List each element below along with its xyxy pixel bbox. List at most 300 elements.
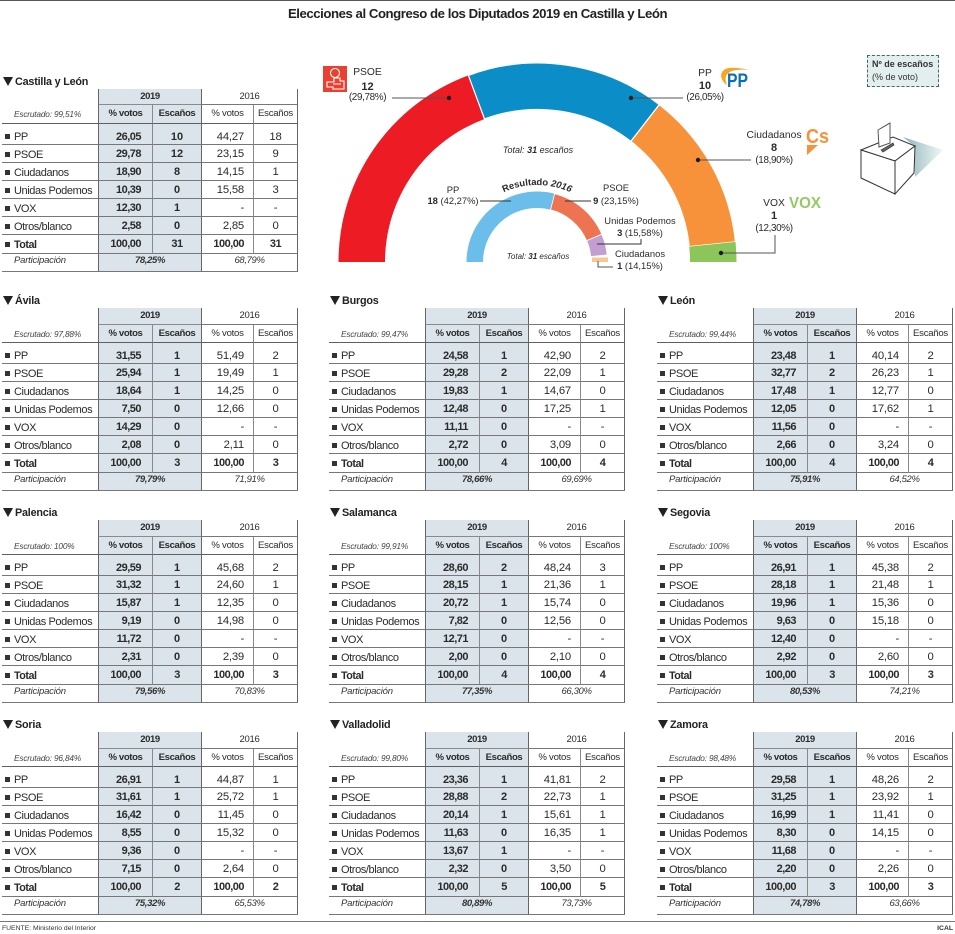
table: Zamora: 11,41	[873, 808, 899, 820]
table: Burgos: 0	[599, 384, 606, 396]
table: Salamanca: PP	[341, 562, 355, 574]
table: Ávila: % votos	[108, 328, 142, 338]
table: Burgos: 17,25	[544, 402, 571, 414]
table: Segovia: PP	[669, 562, 683, 574]
table: Burgos: 2	[599, 350, 606, 362]
table: Burgos: 2,72	[449, 438, 468, 450]
table: Burgos: -	[567, 420, 571, 432]
table: Valladolid: 20,14	[443, 808, 468, 820]
table: Palencia: VOX	[14, 634, 36, 646]
table: Segovia: -	[929, 632, 932, 644]
table: Burgos: 4	[600, 457, 605, 469]
table: León: 32,77	[771, 366, 796, 378]
table: Segovia: 0	[829, 632, 835, 644]
table: Valladolid: 1	[501, 844, 507, 856]
table: Ávila: Participación	[14, 474, 66, 485]
table: Zamora: 2	[927, 774, 934, 786]
table: Burgos: PP	[341, 350, 355, 362]
table: Salamanca: 2	[501, 562, 507, 574]
table: Soria: 0	[272, 808, 279, 820]
table: León: 2	[927, 350, 934, 362]
table: Ávila: Escaños	[159, 328, 195, 338]
label: PP 2016: 18 (42,27%)	[427, 195, 479, 206]
legend: (% de voto)	[872, 72, 918, 82]
table: León: Unidas Podemos	[669, 404, 747, 416]
panel: Burgos	[329, 295, 625, 491]
table: Zamora	[657, 732, 953, 915]
table: Valladolid: Total	[341, 882, 364, 894]
label: total 2019: Total: 31 escaños	[503, 145, 574, 155]
table: Ávila: -	[240, 420, 244, 432]
table: Soria: 0	[272, 862, 279, 874]
table: Castilla y León: 44,27	[217, 130, 244, 142]
table: Zamora: 2019	[795, 734, 815, 745]
table: Burgos: 1	[501, 350, 507, 362]
table: Burgos: Escaños	[585, 328, 620, 338]
table: Zamora: 3	[829, 881, 835, 893]
table: Segovia: 2	[927, 562, 934, 574]
table: Burgos: -	[601, 420, 604, 432]
table: Zamora: 100,00	[868, 881, 899, 893]
table: Palencia: Ciudadanos	[14, 598, 69, 610]
table: Soria: 0	[272, 826, 279, 838]
table: Palencia: 100,00	[110, 669, 141, 681]
table: Segovia: Unidas Podemos	[669, 616, 747, 628]
table: Ávila: 0	[272, 402, 279, 414]
table: Castilla y León: 12,30	[116, 202, 141, 214]
table: León: 12,05	[771, 402, 796, 414]
table: Castilla y León: 2019	[140, 90, 160, 102]
table: Valladolid: 80,89%	[462, 898, 492, 909]
table: Valladolid: -	[601, 844, 604, 856]
table: Castilla y León: 2016	[240, 90, 259, 102]
table: León: 0	[829, 420, 835, 432]
table: Palencia: 2,31	[122, 650, 141, 662]
label: PSOE 2016	[565, 182, 639, 206]
table: Valladolid: 11,63	[444, 826, 468, 838]
table: Burgos: 4	[501, 457, 507, 469]
table: Segovia: -	[895, 632, 899, 644]
label: Unidas Podemos 2016	[597, 215, 676, 244]
table: Salamanca: % votos	[538, 540, 571, 550]
table: Palencia: % votos	[108, 540, 142, 550]
table: León: 1	[927, 366, 934, 378]
table: Ávila: 71,91%	[234, 474, 265, 485]
table: Valladolid: 1	[599, 808, 606, 820]
heading: Palencia: Palencia	[15, 507, 57, 519]
table: Segovia: 3	[928, 669, 933, 681]
label: VOX 2019	[719, 198, 793, 255]
table: Zamora: 0	[829, 826, 835, 838]
table: Zamora: 2,20	[777, 862, 796, 874]
table: Soria: 1	[272, 790, 279, 802]
table: Zamora: Escrutado: 98,48%	[669, 752, 736, 762]
heading: Soria: Soria	[15, 719, 41, 731]
table: Palencia: Total	[14, 670, 36, 682]
table: Castilla y León: PP	[14, 130, 28, 142]
table: Castilla y León: 68,79%	[234, 255, 265, 266]
table: Salamanca: 0	[501, 650, 507, 662]
heading: Burgos: Burgos	[342, 295, 379, 307]
table: Salamanca: % votos	[436, 540, 469, 550]
table: Palencia: 70,83%	[234, 686, 265, 697]
table: Castilla y León: 10	[171, 130, 183, 142]
panel: Valladolid	[329, 719, 625, 915]
table: Castilla y León: 3	[272, 184, 279, 196]
table: Soria: 75,32%	[135, 898, 165, 909]
table: León: 1	[829, 384, 835, 396]
table: Zamora: 2016	[895, 734, 914, 745]
table: Palencia: 2019	[140, 522, 160, 533]
table: Valladolid: Escaños	[585, 752, 620, 762]
table: Soria: 2019	[140, 734, 160, 745]
table: Segovia: Ciudadanos	[669, 598, 724, 610]
panel: Soria	[2, 719, 298, 915]
table: Palencia: 29,59	[116, 562, 141, 574]
table: Zamora: Escaños	[814, 752, 850, 762]
heading: Ávila: Ávila	[15, 295, 40, 307]
table: León: -	[929, 420, 932, 432]
table: Zamora: 1	[829, 808, 835, 820]
table: Segovia: Participación	[669, 686, 721, 697]
table: Salamanca: 0	[501, 614, 507, 626]
table: Palencia: Escaños	[258, 540, 293, 550]
table: Castilla y León: 18	[269, 130, 282, 142]
table: Zamora: 74,78%	[790, 898, 820, 909]
table: Soria: Ciudadanos	[14, 810, 69, 822]
table: Palencia: 2016	[240, 522, 259, 533]
table: Valladolid: Unidas Podemos	[341, 828, 419, 840]
table: Castilla y León: 26,05	[116, 130, 141, 142]
table: Castilla y León	[2, 89, 298, 272]
table: Burgos: 24,58	[443, 350, 468, 362]
table: Castilla y León: % votos	[108, 108, 142, 119]
table: Castilla y León: 14,15	[217, 166, 244, 178]
table: Burgos: 19,83	[443, 384, 468, 396]
table: Palencia: 45,68	[217, 562, 244, 574]
table: Palencia: 24,60	[217, 578, 244, 590]
label: PSOE 2019: 12	[361, 81, 374, 93]
table: Segovia: PSOE	[669, 580, 698, 592]
table: Valladolid: % votos	[538, 752, 571, 762]
table: Valladolid: 3,50	[550, 862, 571, 874]
table: Valladolid: Escrutado: 99,80%	[341, 752, 408, 762]
central chart graphics	[323, 64, 942, 271]
table: Zamora: 1	[829, 790, 835, 802]
panel: Castilla y León	[2, 76, 298, 272]
icon: Ciudadanos logo	[806, 126, 829, 155]
table: Segovia: Escrutado: 100%	[669, 540, 730, 550]
table: Palencia: 0	[272, 650, 279, 662]
table: Castilla y León: Escrutado: 99,51%	[14, 109, 81, 119]
label: PSOE 2019: PSOE	[353, 67, 382, 78]
table: Salamanca: PSOE	[341, 580, 370, 592]
table: Salamanca: 7,82	[449, 614, 468, 626]
table: Palencia: 0	[174, 614, 180, 626]
table: Castilla y León: Escaños	[159, 108, 195, 119]
label: PP 2016: PP	[447, 184, 459, 195]
table: Palencia: Otros/blanco	[14, 652, 72, 664]
table: Burgos: 29,28	[443, 366, 468, 378]
table: Soria: 2	[174, 881, 180, 893]
icon: Ciudadanos logo: Cs	[806, 126, 829, 148]
table: Zamora: 29,58	[771, 774, 796, 786]
table: Salamanca: 1	[501, 596, 507, 608]
table: Valladolid: % votos	[436, 752, 469, 762]
heading: Soria	[3, 719, 42, 731]
table: León: 2019	[795, 310, 815, 321]
table: Zamora: 3	[928, 881, 933, 893]
table: Segovia: 15,36	[872, 596, 899, 608]
table: Palencia: PP	[14, 562, 28, 574]
table: Castilla y León: 8	[174, 166, 180, 178]
source: FUENTE: Ministerio del Interior	[2, 925, 96, 932]
table: Burgos: 0	[501, 438, 507, 450]
label: Ciudadanos 2019: 8	[771, 142, 777, 154]
table: Ávila: 51,49	[217, 350, 244, 362]
table: Palencia: 1	[174, 596, 180, 608]
table: Segovia: 2,92	[777, 650, 796, 662]
table: Burgos: 100,00	[437, 457, 468, 469]
table: Valladolid: 23,36	[443, 774, 468, 786]
table: Valladolid: -	[567, 844, 571, 856]
table: Soria: % votos	[108, 752, 142, 762]
table: Ávila: 31,55	[116, 350, 141, 362]
table: Zamora: 31,25	[771, 790, 796, 802]
table: Ávila: 0	[174, 438, 180, 450]
table: Soria: -	[274, 844, 277, 856]
heading: Ávila	[3, 294, 40, 307]
label: total 2016: Total: 31 escaños	[507, 252, 569, 261]
table: Valladolid: 15,61	[544, 808, 571, 820]
table: Soria: % votos	[211, 752, 244, 762]
table: León: 17,62	[872, 402, 899, 414]
table: Castilla y León: Escaños	[258, 108, 293, 119]
table: León: 1	[829, 350, 835, 362]
panel: Salamanca	[329, 507, 625, 703]
heading: Salamanca: Salamanca	[342, 507, 397, 519]
table: Burgos: 3,09	[550, 438, 571, 450]
table: León: 12,77	[872, 384, 899, 396]
table: Burgos: Total	[341, 458, 364, 470]
table: Ávila: 3	[273, 457, 278, 469]
table: Salamanca: 66,30%	[561, 686, 592, 697]
table: Palencia: 0	[174, 650, 180, 662]
table: Valladolid: 5	[501, 881, 507, 893]
table: Palencia: 2,39	[223, 650, 244, 662]
table: Ávila: 2019	[140, 310, 160, 321]
table: Salamanca: 2,10	[550, 650, 571, 662]
label: PP 2019: 10	[699, 80, 711, 92]
table: Palencia: Unidas Podemos	[14, 616, 92, 628]
table: Salamanca: 0	[501, 632, 507, 644]
table: Castilla y León: Unidas Podemos	[14, 184, 92, 196]
table: Soria: VOX	[14, 846, 36, 858]
title: Elecciones al Congreso de los Diputados 2019 en Castilla y León	[288, 6, 667, 21]
table: Burgos: 69,69%	[561, 474, 592, 485]
table: Castilla y León: 29,78	[116, 148, 141, 160]
label: PP 2019: (26,05%)	[686, 92, 724, 103]
table: Burgos	[329, 308, 625, 491]
heading: Segovia: Segovia	[670, 507, 710, 519]
table: Ávila: Escrutado: 97,88%	[14, 328, 81, 338]
table: Ávila: 2	[272, 350, 279, 362]
table: Soria: 16,42	[116, 808, 141, 820]
table: León: 75,91%	[790, 474, 820, 485]
table: Burgos: Participación	[341, 474, 393, 485]
table: Zamora: 1	[927, 790, 934, 802]
label: Ciudadanos 2019	[696, 130, 801, 166]
table: Soria: 0	[174, 826, 180, 838]
panel: León	[657, 295, 953, 491]
table: Palencia: Escrutado: 100%	[14, 540, 74, 550]
icon: PSOE logo	[323, 66, 347, 92]
table: Castilla y León: 10,39	[116, 184, 141, 196]
table: Salamanca: Otros/blanco	[341, 652, 399, 664]
table: Soria: 1	[174, 774, 180, 786]
table: León: 0	[829, 438, 835, 450]
table: Ávila: PP	[14, 350, 28, 362]
table: Segovia: 28,18	[771, 578, 796, 590]
table: León: Total	[669, 458, 692, 470]
table: Ávila: 2,11	[224, 438, 244, 450]
table: Castilla y León: VOX	[14, 202, 36, 214]
table: Palencia: 0	[272, 614, 279, 626]
table: Soria: Otros/blanco	[14, 864, 72, 876]
table: Segovia: 0	[927, 614, 934, 626]
table: Burgos: Ciudadanos	[341, 386, 396, 398]
table: Salamanca: Escrutado: 99,91%	[341, 540, 408, 550]
table: Castilla y León: 23,15	[217, 148, 244, 160]
table: Salamanca: VOX	[341, 634, 363, 646]
table: Castilla y León: PSOE	[14, 148, 43, 160]
table: Salamanca: 0	[599, 650, 606, 662]
table: Salamanca: -	[601, 632, 604, 644]
table: Ávila: 3	[174, 457, 180, 469]
table: Segovia	[657, 520, 953, 703]
table: Palencia	[2, 520, 298, 703]
table: Valladolid: PSOE	[341, 792, 370, 804]
table: León: Escrutado: 99,44%	[669, 328, 736, 338]
table: Segovia: 100,00	[765, 669, 796, 681]
table: Burgos: 1	[599, 402, 606, 414]
table: Soria: PSOE	[14, 792, 43, 804]
table: Salamanca: Ciudadanos	[341, 598, 396, 610]
table: Soria: 2,64	[223, 862, 244, 874]
table: Salamanca	[329, 520, 625, 703]
table: Segovia: Escaños	[814, 540, 850, 550]
table: Palencia: 1	[272, 578, 279, 590]
table: Castilla y León: 2,85	[223, 220, 244, 232]
table: Burgos: 2019	[467, 310, 487, 321]
table: Burgos: 11,11	[444, 420, 468, 432]
table: Segovia: Escaños	[913, 540, 948, 550]
table: León: 2	[829, 366, 835, 378]
table: Salamanca: 28,60	[443, 562, 468, 574]
table: Soria: 26,91	[116, 774, 141, 786]
table: Salamanca: 1	[599, 578, 606, 590]
table: Castilla y León: -	[240, 202, 244, 214]
table: Valladolid: 41,81	[544, 774, 571, 786]
table: Salamanca: 100,00	[540, 669, 571, 681]
table: Ávila: 19,49	[217, 366, 244, 378]
table: León: Escaños	[913, 328, 948, 338]
table: Salamanca: Participación	[341, 686, 393, 697]
table: Soria: 0	[174, 862, 180, 874]
table: León: 2,66	[777, 438, 796, 450]
table: Segovia: 19,96	[771, 596, 796, 608]
table: Burgos: 22,09	[544, 366, 571, 378]
table: Zamora: 0	[927, 808, 934, 820]
table: Soria: -	[240, 844, 244, 856]
table: Castilla y León: Participación	[14, 255, 66, 266]
table: Segovia: 3	[829, 669, 835, 681]
table: Burgos: 2016	[567, 310, 586, 321]
table: Valladolid: Participación	[341, 898, 393, 909]
table: Castilla y León: 12	[171, 148, 183, 160]
table: Salamanca: 4	[600, 669, 605, 681]
table: Salamanca: 2,00	[449, 650, 468, 662]
table: Palencia: 3	[174, 669, 180, 681]
table: Palencia: 0	[272, 596, 279, 608]
table: Valladolid: 100,00	[540, 881, 571, 893]
table: Zamora: 11,68	[772, 844, 796, 856]
table: Zamora: % votos	[866, 752, 899, 762]
label: VOX 2019: 1	[771, 210, 777, 222]
table: Palencia: 100,00	[213, 669, 244, 681]
chart: 2019 seats semicircle	[338, 63, 736, 262]
label: Ciudadanos 2016: Ciudadanos	[615, 248, 665, 259]
table: Zamora: 48,26	[872, 774, 899, 786]
table: Ávila: Otros/blanco	[14, 440, 72, 452]
table: Palencia: 12,35	[217, 596, 244, 608]
table: Castilla y León: 0	[174, 184, 180, 196]
table: Burgos: 1	[501, 384, 507, 396]
table: Burgos: % votos	[538, 328, 571, 338]
table: Soria: Total	[14, 882, 36, 894]
table: Palencia: 79,56%	[135, 686, 165, 697]
table: Castilla y León: 1	[272, 166, 279, 178]
table: Valladolid: Ciudadanos	[341, 810, 396, 822]
table: Ávila: 0	[272, 438, 279, 450]
table: Salamanca: Unidas Podemos	[341, 616, 419, 628]
chart: 2016 seats semicircle	[466, 191, 608, 262]
table: Salamanca: 2019	[467, 522, 487, 533]
table: Castilla y León: 0	[174, 220, 180, 232]
table: Zamora: Participación	[669, 898, 721, 909]
label: PSOE 2016: PSOE	[603, 182, 629, 193]
label: Ciudadanos 2016	[598, 248, 665, 271]
table: Soria: 11,45	[218, 808, 244, 820]
table: Soria: 2016	[240, 734, 259, 745]
table: Segovia: 1	[829, 596, 835, 608]
table: Segovia: 0	[829, 614, 835, 626]
table: Burgos: 12,48	[443, 402, 468, 414]
table: Zamora: Total	[669, 882, 692, 894]
table: Segovia: 21,48	[872, 578, 899, 590]
table: Soria: Escaños	[159, 752, 195, 762]
table: León: Otros/blanco	[669, 440, 727, 452]
table: Palencia: PSOE	[14, 580, 43, 592]
table: Soria: 9,36	[122, 844, 141, 856]
table: Castilla y León: 2,58	[122, 220, 141, 232]
table: Palencia: 1	[174, 562, 180, 574]
table: Salamanca: Escaños	[585, 540, 620, 550]
table: Ávila: Escaños	[258, 328, 293, 338]
table: Segovia: 74,21%	[889, 686, 920, 697]
label: VOX 2019: VOX	[763, 198, 785, 209]
table: Ávila: 0	[174, 420, 180, 432]
